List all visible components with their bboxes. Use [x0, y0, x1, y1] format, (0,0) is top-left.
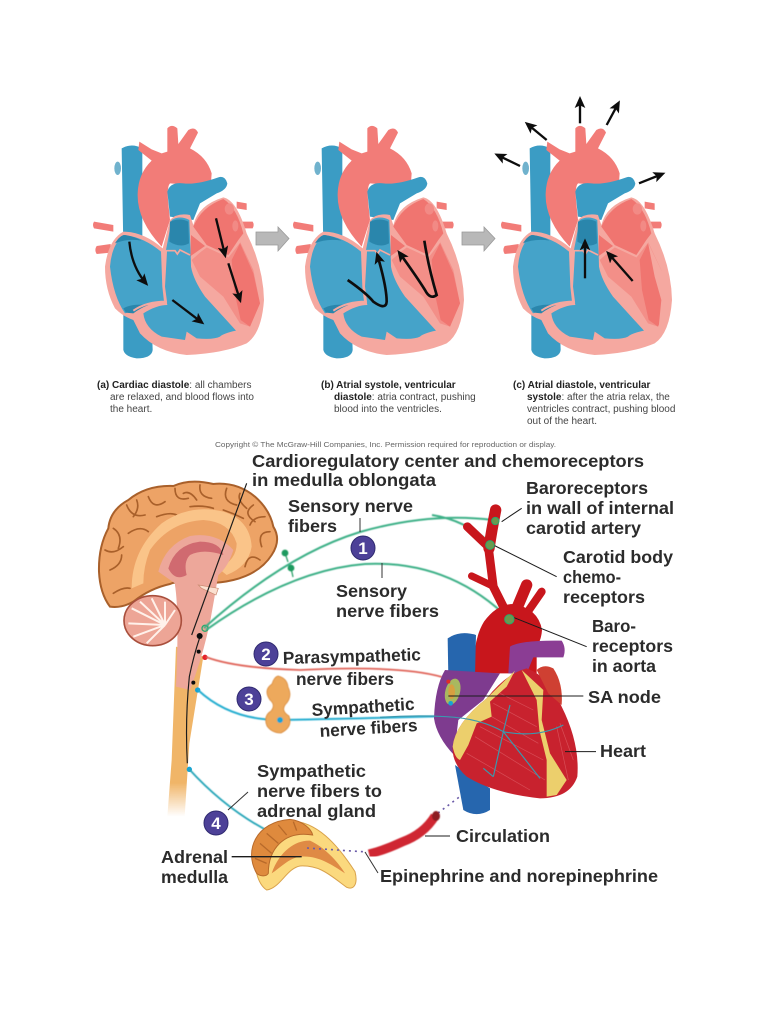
- label: sympathetic to adrenal: adrenal gland: [257, 801, 376, 821]
- caption b: (b) Atrial systole, ventricular: [321, 380, 456, 391]
- caption c: : after the atria relax, the: [561, 392, 670, 403]
- label: upper sensory nerve fibers: Sensory nerve: [288, 496, 413, 516]
- label: circulation: Circulation: [456, 826, 550, 846]
- nerve leader ticks: [228, 518, 382, 873]
- label: adrenal medulla: [161, 847, 228, 887]
- receptor markers: [486, 517, 514, 624]
- medulla leader line: [232, 855, 302, 859]
- badge 1: 1: [358, 539, 368, 558]
- vena cava upper: [448, 633, 476, 677]
- badge 1: [351, 536, 375, 560]
- vena cava lower: [455, 765, 490, 814]
- cortex lobes: [255, 822, 297, 863]
- label: baroreceptors carotid: carotid artery: [526, 518, 641, 538]
- white matter band: [132, 509, 252, 588]
- cerebrum: [99, 482, 277, 607]
- caption a: the heart.: [110, 404, 152, 415]
- label: SA node: SA node: [588, 687, 661, 707]
- label: baroreceptors carotid: in wall of internal: [526, 498, 674, 518]
- hormone dotted paths: [307, 795, 462, 852]
- label: carotid body: chemo-: [563, 567, 621, 587]
- label: parasympathetic: [283, 644, 421, 689]
- adrenal cortex: [252, 819, 313, 876]
- badge 3: 3: [244, 690, 254, 709]
- caption a: are relaxed, and blood flows into: [110, 392, 254, 403]
- label: parasympathetic: nerve fibers: [296, 669, 394, 689]
- medulla tract: [187, 483, 247, 763]
- caption a: (a) Cardiac diastole: [97, 380, 190, 391]
- label: sympathetic to adrenal: nerve fibers to: [257, 781, 382, 801]
- heart illustration c: [501, 126, 672, 358]
- arrow: a to b: [256, 227, 289, 251]
- panel: ventricular systole heart: [497, 99, 672, 358]
- label: lower sensory nerve fibers: [336, 581, 439, 621]
- badge 4: [204, 811, 228, 835]
- SA node: [442, 677, 463, 706]
- anatomical heart: [380, 508, 596, 836]
- heart illustration a: [93, 126, 264, 358]
- label: sympathetic to adrenal: Sympathetic: [257, 761, 366, 781]
- cerebellum white rays: [128, 598, 175, 643]
- adrenal sympathetic nerve: [189, 769, 307, 848]
- label: carotid body: receptors: [563, 587, 645, 607]
- label: baroreceptors aorta: Baro-: [592, 616, 636, 636]
- caption a: : all chambers: [189, 380, 252, 391]
- label: sympathetic to adrenal: [257, 761, 382, 821]
- panel: atrial systole heart: [293, 126, 464, 358]
- circulation vessel: [369, 811, 440, 854]
- label: carotid body: Carotid body: [563, 547, 673, 567]
- pulmonary trunk: [508, 641, 565, 673]
- spinal cord: [167, 647, 203, 817]
- diencephalon: [158, 535, 233, 600]
- caption c: out of the heart.: [527, 416, 597, 427]
- label: sympathetic: Sympathetic: [311, 694, 415, 720]
- label: sympathetic: nerve fibers: [319, 715, 418, 741]
- label: baroreceptors aorta: in aorta: [592, 656, 656, 676]
- label: lower sensory nerve fibers: nerve fibers: [336, 601, 439, 621]
- caption c: systole: [527, 392, 562, 403]
- thickened ventricle wall: [648, 243, 669, 327]
- label: parasympathetic: Parasympathetic: [283, 644, 421, 668]
- adrenal capsule: [253, 821, 356, 890]
- aortic arch: [474, 604, 542, 673]
- sympathetic nerve: [198, 690, 447, 720]
- label: cardioregulatory center: [252, 451, 644, 490]
- label: epinephrine: Epinephrine and norepinephrine: [380, 866, 658, 886]
- caption c: ventricles contract, pushing blood: [527, 404, 675, 415]
- copyright line: Copyright © The McGraw-Hill Companies, Inc. Permission required for reproduction or display.: [215, 440, 556, 449]
- badge 3: [237, 687, 261, 711]
- parasympathetic nerve: [206, 657, 442, 677]
- adrenal gland: [232, 819, 356, 890]
- number badges: [204, 536, 375, 835]
- caption b: : atria contract, pushing: [372, 392, 476, 403]
- label: cardioregulatory center: Cardioregulatory center and chemoreceptors: [252, 451, 644, 471]
- caption c: (c) Atrial diastole, ventricular: [513, 380, 651, 391]
- leader lines: [425, 508, 596, 836]
- adrenal medulla core: [272, 841, 345, 873]
- sensory nerve ganglia: [282, 550, 294, 577]
- nerve pathways: [189, 515, 510, 848]
- caption b: blood into the ventricles.: [334, 404, 442, 415]
- upper sensory nerve: [204, 515, 493, 628]
- cardiac nerve branches: [380, 705, 563, 778]
- cerebellum: [124, 596, 181, 646]
- lower sensory nerve: [206, 564, 510, 630]
- flow arrows a: [129, 218, 240, 322]
- flow arrows b: [348, 241, 437, 306]
- label: upper sensory nerve fibers: fibers: [288, 516, 337, 536]
- brainstem: [175, 573, 214, 690]
- sympathetic ganglion: [266, 676, 290, 733]
- badge 4: 4: [211, 814, 221, 833]
- gyri folds: [105, 485, 270, 593]
- label: baroreceptors aorta: receptors: [592, 636, 673, 656]
- right atrium: [434, 670, 500, 755]
- label: sympathetic: [311, 694, 418, 741]
- left auricle: [537, 666, 562, 705]
- label: baroreceptors carotid: [526, 478, 674, 538]
- badge 2: [254, 642, 278, 666]
- caption b: diastole: [334, 392, 372, 403]
- label: upper sensory nerve fibers: [288, 496, 413, 536]
- synapse dots: [187, 625, 208, 772]
- anatomy labels: [161, 451, 674, 887]
- label: carotid body: [563, 547, 673, 607]
- label: lower sensory nerve fibers: Sensory: [336, 581, 407, 601]
- muscle striations: [467, 693, 573, 790]
- label: cardioregulatory center: in medulla oblongata: [252, 470, 436, 490]
- heart illustration b: [293, 126, 464, 358]
- SA node core: [446, 680, 455, 706]
- badge 2: 2: [261, 645, 271, 664]
- brain and spinal cord: [99, 482, 277, 817]
- label: adrenal medulla: medulla: [161, 867, 228, 887]
- carotid arteries: [467, 510, 542, 617]
- label: baroreceptors aorta: [592, 616, 673, 676]
- label: heart: Heart: [600, 741, 646, 761]
- panel: cardiac diastole heart: [93, 126, 264, 358]
- coronary fat: [453, 670, 567, 797]
- heart body: [453, 668, 578, 798]
- arrow: b to c: [462, 227, 495, 251]
- label: adrenal medulla: Adrenal: [161, 847, 228, 867]
- label: baroreceptors carotid: Baroreceptors: [526, 478, 648, 498]
- flow arrows c: [497, 99, 662, 281]
